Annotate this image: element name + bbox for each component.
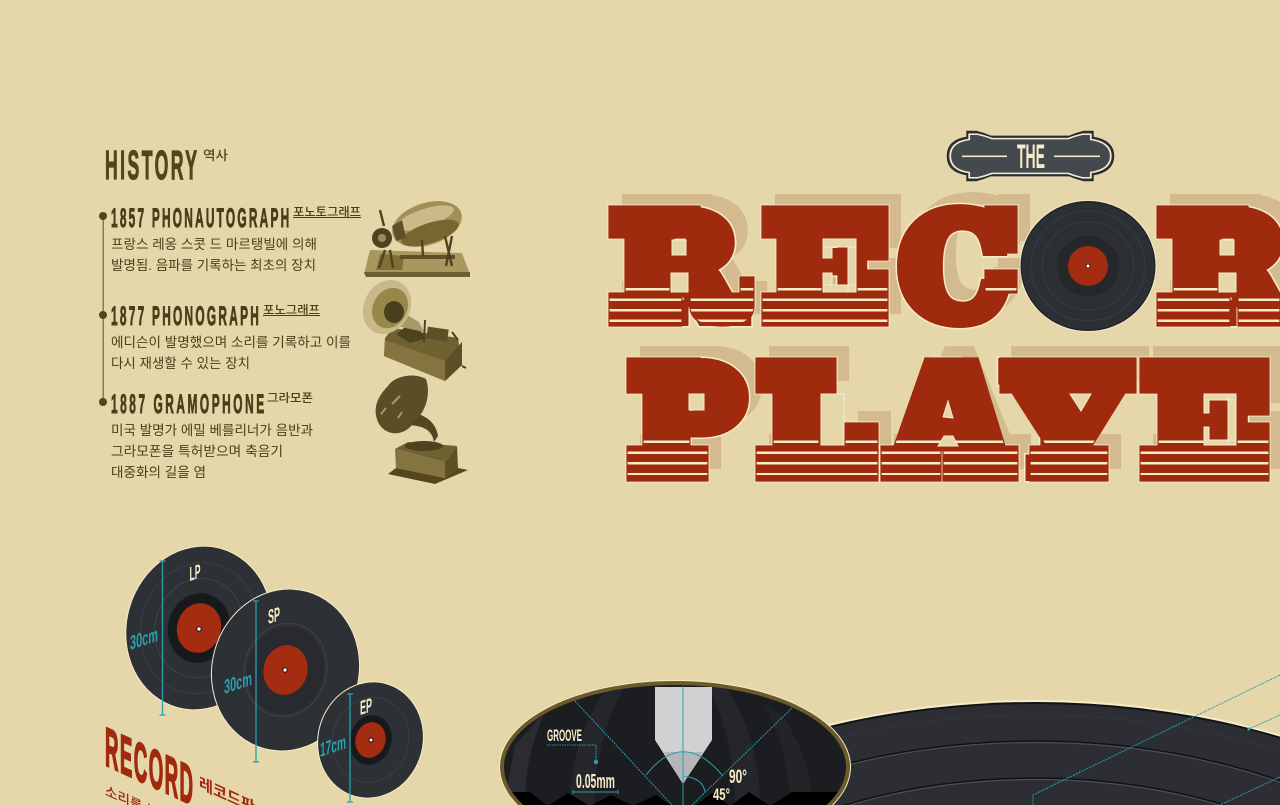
icon: vinyl disc in title (1020, 200, 1156, 332)
size measurements: 17cm (320, 731, 346, 762)
title shadow: A (902, 325, 1018, 494)
title shadow: P (646, 325, 756, 495)
size measurements: 30cm (224, 667, 252, 699)
inset labels: 0.05mm (576, 771, 615, 793)
inset labels: 90° (729, 767, 747, 788)
size measurements: 30cm (130, 623, 158, 655)
illustration: phonograph (354, 271, 466, 381)
title: record: E (768, 186, 884, 350)
title shadow: R (628, 174, 755, 339)
entry: 1887 gramophone: 그라모폰 (267, 391, 313, 405)
entry: 1877 phonograph (111, 302, 351, 371)
entry: 1887 gramophone: 미국 발명가 에밀 베를리너가 음반과 (111, 423, 313, 438)
record: lp (107, 529, 291, 727)
title: player: E (1146, 337, 1266, 506)
title: player: A (889, 337, 1005, 506)
title: player: E (1146, 337, 1266, 506)
title shadow: C (913, 174, 1021, 338)
entry: 1877 phonograph: 포노그래프 (263, 303, 320, 317)
title: player: Y (1007, 336, 1119, 506)
title: player: P (633, 337, 743, 507)
title shadow (622, 174, 1280, 495)
record: ep: EP (360, 694, 372, 720)
entry: 1857 phonautograph: 프랑스 레옹 스콧 드 마르탱빌에 의해 (111, 237, 317, 252)
angle guides (547, 686, 792, 805)
badge: the (948, 132, 1113, 180)
title: record: R (615, 186, 742, 351)
title: record: C (900, 186, 1008, 350)
record: sp (193, 572, 378, 768)
title: player: L (763, 336, 869, 506)
illustration: phonautograph (364, 193, 470, 277)
record: lp: LP (190, 560, 200, 586)
inset labels: 45° (713, 785, 730, 804)
record: sp: SP (268, 603, 280, 629)
title: player: P (633, 337, 743, 507)
title: record: R (615, 186, 742, 351)
title shadow: Y (1020, 324, 1132, 494)
entry: 1857 phonautograph: 발명됨. 음파를 기록하는 최초의 장치 (111, 258, 316, 273)
title shadow: E (781, 174, 897, 338)
entry: 1877 phonograph: 1877 PHONOGRAPH (111, 302, 259, 331)
entry: 1887 gramophone: 1887 GRAMOPHONE (111, 390, 264, 419)
callout lines on record (1033, 675, 1280, 805)
title: record: E (768, 186, 884, 350)
illustration: gramophone (376, 375, 468, 484)
entry: 1857 phonautograph (111, 204, 361, 273)
title: player: A (889, 337, 1005, 506)
entry: 1887 gramophone: 대중화의 길을 염 (111, 465, 206, 480)
title: player: L (763, 336, 869, 506)
entry: 1887 gramophone (111, 390, 313, 480)
title shadow: E (1159, 325, 1279, 494)
entry: 1877 phonograph: 다시 재생할 수 있는 장치 (111, 356, 250, 371)
entry: 1887 gramophone: 그라모폰을 특허받으며 축음기 (111, 444, 283, 459)
entry: 1857 phonautograph: 1857 PHONAUTOGRAPH (111, 204, 289, 233)
stylus (655, 687, 712, 784)
title: record: C (900, 186, 1008, 350)
history timeline (99, 212, 107, 406)
large vinyl record (484, 700, 1280, 805)
title: record (609, 186, 1280, 351)
heading: record (105, 715, 255, 805)
record: ep (304, 669, 437, 805)
inset labels (547, 726, 747, 804)
inset labels: GROOVE (547, 726, 582, 745)
inset: groove magnification (499, 680, 851, 805)
entry: 1857 phonautograph: 포노토그래프 (293, 205, 361, 219)
entry: 1877 phonograph: 에디슨이 발명했으며 소리를 기록하고 이를 (111, 335, 351, 350)
badge: the: THE (1017, 138, 1045, 176)
title: player (627, 336, 1280, 507)
title shadow: L (776, 324, 882, 494)
heading: history: HISTORY (105, 141, 197, 188)
title: player: Y (1007, 336, 1119, 506)
size measurements (130, 561, 353, 802)
heading: history: 역사 (203, 148, 228, 163)
